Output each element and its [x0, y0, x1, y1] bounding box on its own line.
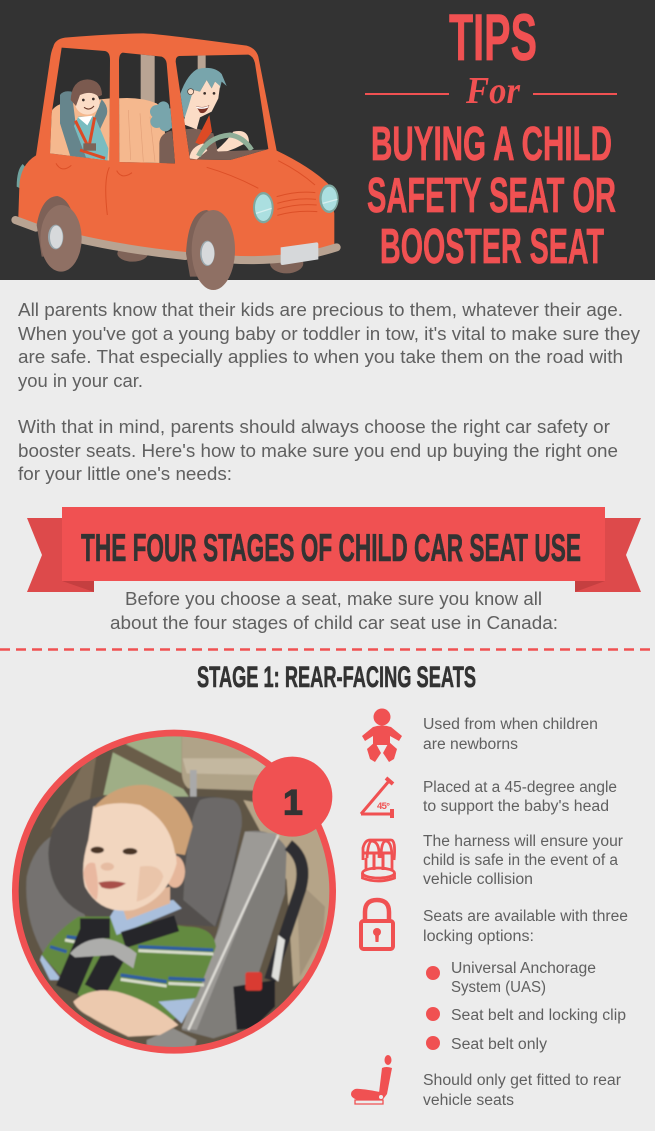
- icon: harness: [362, 840, 395, 881]
- intro paragraph 1: are safe. That especially applies to when you take them on the road with: [18, 346, 623, 367]
- text: harness: vehicle collision: [423, 871, 533, 888]
- driver curly hair: [150, 101, 172, 132]
- license plate: [281, 242, 318, 265]
- text: newborns: Used from when children: [423, 716, 598, 733]
- intro paragraph 2: booster seats. Here's how to make sure you end up buying the right one: [18, 440, 618, 461]
- driver face: [183, 80, 220, 129]
- intro paragraph 1: [18, 299, 641, 391]
- intro paragraph 1: All parents know that their kids are precious to them, whatever their age.: [18, 299, 623, 320]
- stage number badge: 1: [283, 783, 303, 822]
- text: newborns: [423, 716, 598, 753]
- intro paragraph 1: you in your car.: [18, 370, 143, 391]
- far wheels: [117, 245, 303, 273]
- text: harness: [423, 833, 623, 888]
- child face: [83, 802, 177, 911]
- banner subtext: about the four stages of child car seat use in Canada:: [110, 612, 558, 633]
- For divider: For: [465, 70, 521, 112]
- harness straps: [67, 923, 117, 990]
- front wheel: [186, 210, 235, 290]
- seat left wing: [26, 835, 87, 957]
- text: harness: The harness will ensure your: [423, 833, 623, 850]
- bumpers: [15, 220, 337, 260]
- title line: TIPS: TIPS: [449, 0, 537, 74]
- text: rear vehicle seats: vehicle seats: [423, 1092, 514, 1109]
- headlights: [253, 184, 339, 223]
- illustration: parent driving orange car with child in seat: [15, 33, 339, 290]
- steering wheel: [198, 135, 252, 156]
- stage 1 photo: smiling toddler in a car seat: [12, 730, 337, 1054]
- shirt collar and cuffs: [110, 900, 182, 935]
- seat side: [182, 831, 287, 1038]
- rear bench seat and post: [118, 53, 177, 163]
- title: [365, 0, 617, 274]
- bullet list: locking options: Seat belt only: [451, 1036, 547, 1053]
- text: rear vehicle seats: Should only get fitted to rear: [423, 1072, 621, 1089]
- bullet list: locking options: Universal Anchorage: [451, 960, 596, 977]
- driver hair: [177, 68, 227, 120]
- text: 45 degree angle: to support the baby's head: [423, 798, 609, 815]
- text: rear vehicle seats: [423, 1072, 621, 1109]
- text: harness: child is safe in the event of a: [423, 852, 618, 869]
- banner subtext: [110, 588, 558, 633]
- banner subtext: Before you choose a seat, make sure you know all: [125, 588, 542, 609]
- nose and mouth: [101, 863, 114, 871]
- icon: 45-degree angle: 45°: [377, 801, 390, 812]
- child hair: [93, 785, 193, 855]
- child ear: [165, 856, 185, 888]
- seat headrest: [48, 797, 242, 927]
- child in car seat: [49, 79, 110, 163]
- ribbon banner: [27, 507, 641, 592]
- stage 1 heading: STAGE 1: REAR-FACING SEATS: [197, 661, 476, 694]
- driver: [177, 53, 269, 161]
- stage number badge: [252, 757, 332, 837]
- icon: 45-degree angle: [361, 778, 393, 818]
- text: locking options: [423, 908, 628, 945]
- driver body: [186, 128, 218, 160]
- header band: [0, 0, 655, 280]
- text: locking options: locking options:: [423, 928, 534, 945]
- child seat shell: [60, 91, 90, 158]
- body details: [56, 161, 317, 215]
- text: 45 degree angle: [423, 779, 617, 815]
- dashboard: [204, 150, 266, 160]
- intro paragraph 2: With that in mind, parents should always choose the right car safety or: [18, 416, 610, 437]
- child neck: [120, 887, 170, 920]
- photo background: [18, 737, 303, 1046]
- bullet list: locking options: Seat belt and locking clip: [451, 1007, 626, 1024]
- sweater stripes: [50, 937, 213, 982]
- text: locking options: Seats are available with three: [423, 908, 628, 925]
- arm and hands: [216, 131, 249, 152]
- child sweater: [42, 916, 216, 1020]
- icon: baby: [362, 708, 402, 762]
- rear seat left: [49, 98, 110, 163]
- rear wheel: [37, 196, 82, 272]
- icon: car seat: [351, 1055, 392, 1104]
- chest clip: [70, 938, 137, 968]
- car body: [18, 33, 334, 262]
- text: newborns: are newborns: [423, 736, 518, 753]
- icon: padlock: [361, 900, 393, 949]
- intro paragraph 2: for your little one's needs:: [18, 463, 232, 484]
- text: 45 degree angle: Placed at a 45-degree angle: [423, 779, 617, 796]
- rear light: [17, 164, 25, 189]
- eyes: [91, 847, 104, 853]
- bullet list: locking options: [426, 960, 626, 1053]
- child torso: [74, 117, 108, 161]
- windows: [50, 48, 268, 163]
- harness straps: [75, 117, 105, 158]
- intro paragraph 2: [18, 416, 618, 484]
- bullet list: locking options: System (UAS): [451, 979, 546, 996]
- child hand and arm: [73, 990, 178, 1037]
- intro paragraph 1: When you've got a young baby or toddler in tow, it's vital to make sure they: [18, 323, 641, 344]
- child head: [75, 91, 100, 115]
- seat handle: [270, 845, 302, 980]
